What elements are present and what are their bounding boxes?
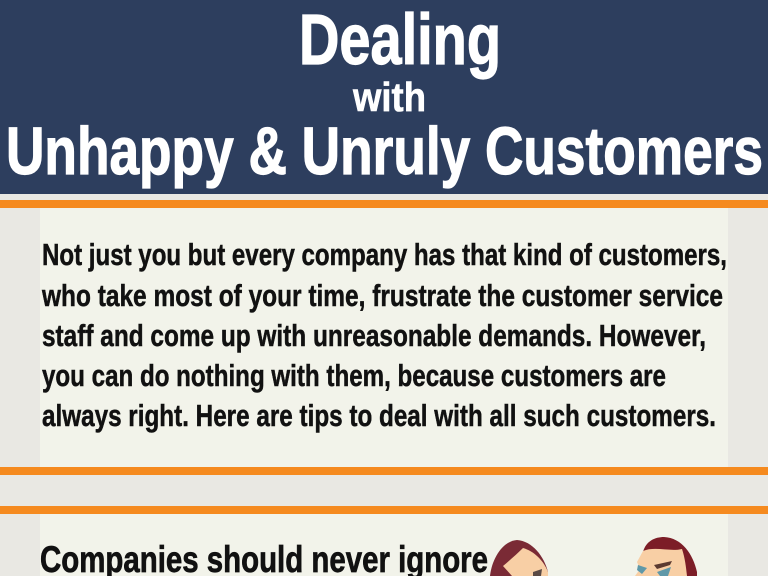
- icon: left cartoon face: [490, 540, 548, 576]
- panel: companies should never ignore: [0, 506, 768, 576]
- icon: right cartoon face: [635, 537, 697, 576]
- title: with: with: [352, 74, 426, 120]
- intro paragraph: [41, 237, 727, 433]
- panel: introduction: [0, 200, 768, 475]
- title: Dealing: Dealing: [299, 1, 501, 80]
- header banner: [0, 0, 768, 194]
